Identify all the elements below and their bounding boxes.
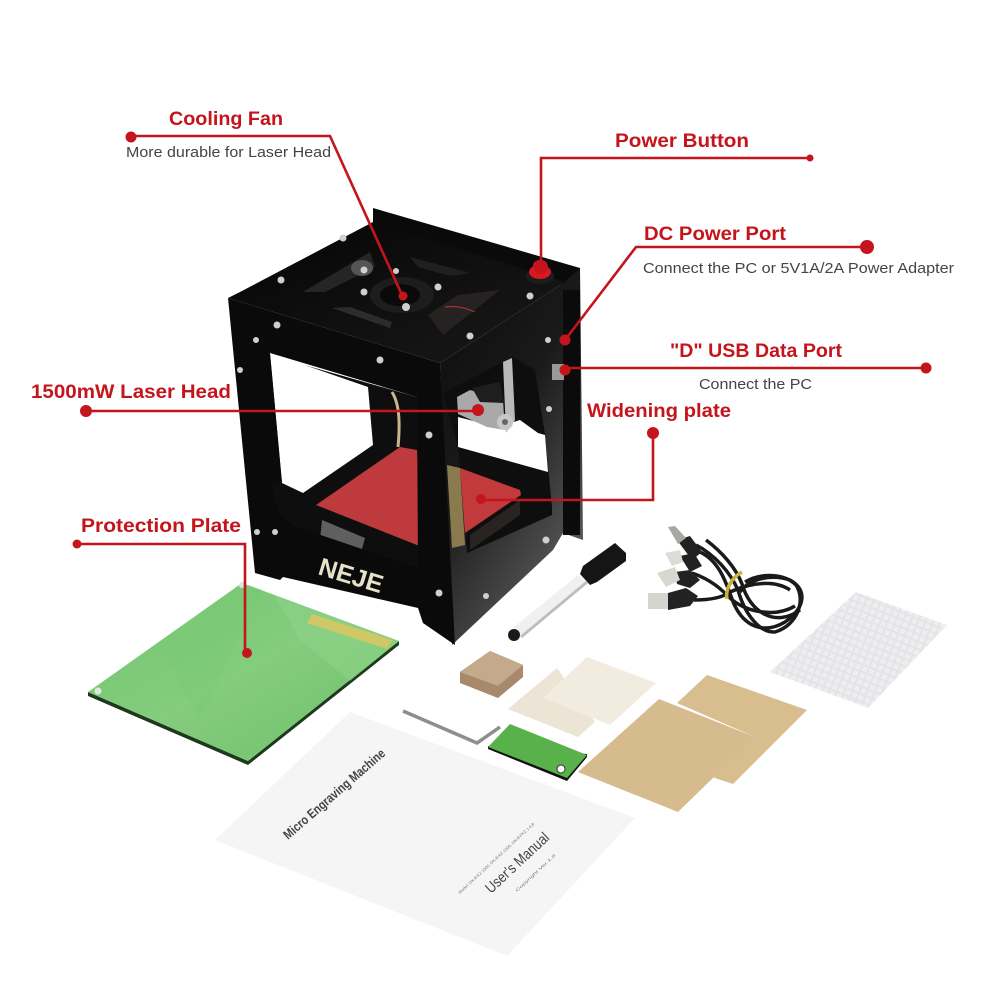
connector tips: [648, 526, 702, 610]
user's manual booklet: [215, 712, 635, 956]
callout: laser head: [31, 381, 484, 417]
power button: [526, 260, 554, 284]
USB port: [552, 364, 564, 380]
callout: USB data port: Connect the PC: [699, 377, 812, 393]
user's manual booklet: Model: DK-8-KZ 1000, DK-8-KZ 1500, DK-8-FKZ 1.6.8: [457, 821, 536, 895]
user's manual booklet: Micro Engraving Machine: [280, 746, 388, 842]
front panel interior: [262, 353, 422, 575]
callout: protection plate: Protection Plate: [81, 515, 241, 537]
felt sheets: [508, 657, 656, 737]
callout: USB data port: "D" USB Data Port: [670, 340, 843, 362]
right window interior: [443, 357, 552, 553]
callout: power button: [534, 130, 814, 274]
right window background: [458, 417, 548, 472]
laser head assembly: [457, 358, 515, 433]
USB power cables: [648, 526, 802, 632]
callout: cooling fan: [126, 108, 408, 300]
yellow rubber band: [727, 572, 742, 599]
callout: USB data port: [560, 340, 932, 393]
callout: widening plate: Widening plate: [587, 400, 731, 422]
laser warning label: [307, 614, 393, 649]
cardboard sheets: [578, 675, 807, 812]
laser engraver machine: [228, 208, 583, 645]
top plate: [228, 222, 565, 363]
right side panel: [440, 268, 583, 645]
callout: protection plate: [72, 515, 252, 658]
white mesh sheet: [770, 592, 947, 708]
front window background: [270, 353, 373, 493]
protection plate: [88, 582, 399, 765]
NEJE logo: NEJE: [315, 553, 387, 599]
widening plate: [316, 447, 521, 548]
callout: widening plate: [476, 400, 731, 504]
callout: cooling fan: Cooling Fan: [169, 108, 283, 130]
callout: DC power port: [560, 223, 954, 346]
callout: laser head: 1500mW Laser Head: [31, 381, 231, 403]
green tag: [488, 724, 587, 781]
marker pen: [508, 543, 626, 641]
user's manual booklet: Copyright Ver.1.0: [514, 852, 557, 893]
wood block: [460, 651, 523, 698]
callout: DC power port: Connect the PC or 5V1A/2A Power Adapter: [643, 261, 954, 277]
callout: cooling fan: More durable for Laser Head: [126, 145, 331, 161]
allen key: [403, 711, 500, 743]
top openings: [303, 252, 500, 335]
front panel frame: [228, 298, 455, 645]
rail and bottom parts: [320, 520, 365, 556]
cooling fan: [370, 277, 434, 313]
callout: power button: Power Button: [615, 130, 749, 152]
ribbon cable: [392, 392, 399, 447]
callout: DC power port: DC Power Port: [644, 223, 787, 245]
user's manual booklet: User's Manual: [482, 829, 553, 897]
screws: [237, 234, 552, 599]
back rising panel: [373, 208, 580, 290]
